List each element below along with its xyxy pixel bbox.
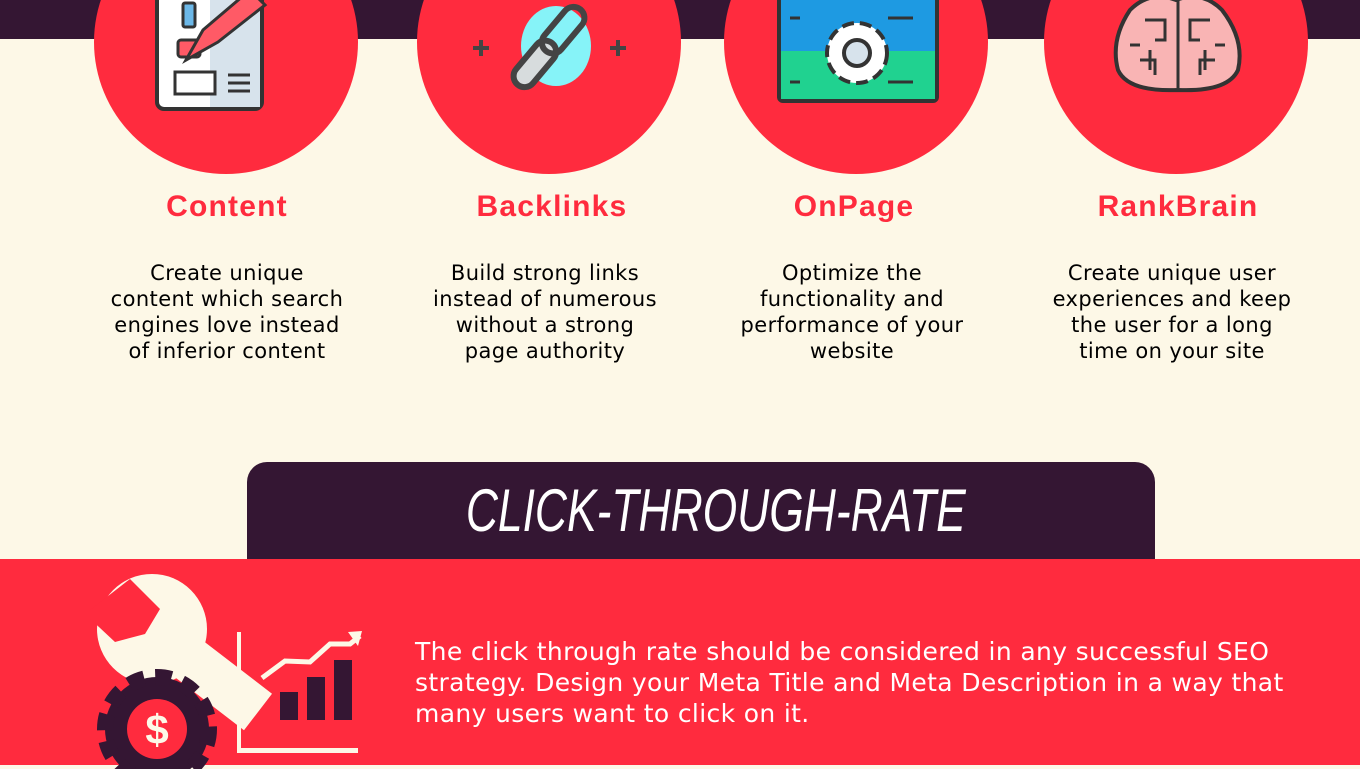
text: onpage: functionality and [760,287,944,311]
icon: onpage [724,0,988,174]
text: content: content which search [111,287,343,311]
text: backlinks: without a strong [456,313,634,337]
text: onpage: Optimize the [782,261,922,285]
text: content: engines love instead [114,313,340,337]
icon: rankbrain [1044,0,1308,174]
text: backlinks: instead of numerous [433,287,657,311]
text: ctr description: strategy. Design your Meta Title and Meta Description in a way that [415,668,1284,697]
text: content: of inferior content [128,339,326,363]
panel: ctr band [0,559,1360,765]
icon: content [94,0,358,174]
text: content: Create unique [150,261,304,285]
heading: rankbrain: RankBrain [1098,190,1258,223]
icon: wrench gear chart: $ [145,706,169,753]
text: onpage: website [810,339,894,363]
text: backlinks: page authority [465,339,625,363]
heading: content: Content [166,190,288,223]
text: ctr description [414,637,1284,728]
text: backlinks [433,261,657,363]
text: rankbrain [1053,261,1291,363]
heading: backlinks: Backlinks [477,190,627,223]
text: backlinks: Build strong links [451,261,639,285]
text: ctr description: The click through rate should be considered in any successful SEO [415,637,1269,666]
title tab: click-through-rate: CLICK-THROUGH-RATE [466,477,966,544]
icon: backlinks [417,0,681,174]
heading: onpage: OnPage [794,190,914,223]
title tab: click-through-rate [247,462,1155,562]
text: rankbrain: Create unique user [1068,261,1276,285]
icon circles [94,0,1308,174]
text: ctr description: many users want to click on it. [415,699,810,728]
icon: wrench gear chart [97,574,362,769]
text: content [111,261,343,363]
text: onpage: performance of your [741,313,963,337]
text: rankbrain: time on your site [1079,339,1265,363]
top dark band [0,0,1360,39]
text: onpage [741,261,963,363]
text: rankbrain: the user for a long [1071,313,1273,337]
text: rankbrain: experiences and keep [1053,287,1291,311]
